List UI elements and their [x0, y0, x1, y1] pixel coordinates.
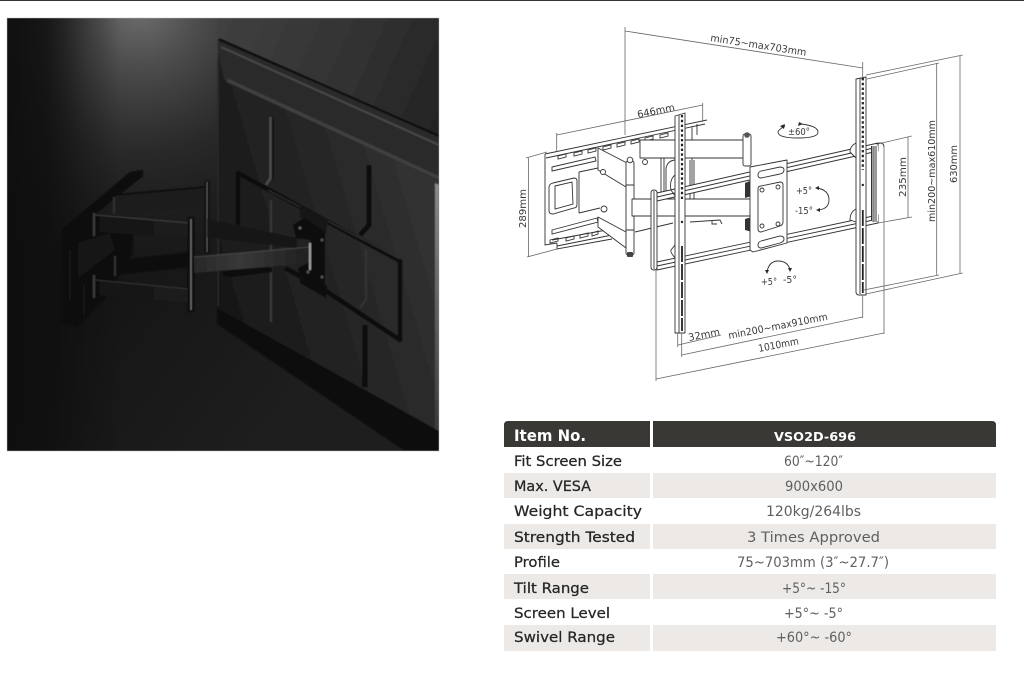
row: Screen Level: Screen Level [514, 606, 610, 622]
left vertical VESA strip [670, 113, 685, 333]
row: Swivel Range [504, 625, 996, 651]
photo edge [7, 18, 439, 451]
row: Fit Screen Size: Fit Screen Size [514, 454, 622, 470]
dimension: 630mm [866, 55, 963, 294]
row: Screen Level [514, 606, 843, 622]
dimension: 1010mm [656, 147, 884, 381]
icon: tilt +5° -15°: -15° [795, 206, 813, 217]
row: Max. VESA [504, 473, 996, 498]
row: Screen Level: +5°~ -5° [784, 606, 843, 622]
table header: VSO2D-696 [774, 429, 856, 444]
icon: screen level +5° -5°: +5° [761, 277, 777, 288]
row: Max. VESA: Max. VESA [514, 479, 591, 495]
row: Strength Tested: 3 Times Approved [747, 530, 880, 546]
row: Weight Capacity: Weight Capacity [514, 504, 642, 520]
row: Swivel Range: +60°~ -60° [776, 630, 852, 646]
row: Profile: 75~703mm (3″~27.7″) [737, 555, 889, 571]
top border line [0, 0, 1024, 1]
icon: tilt head [293, 218, 327, 286]
dimension: 32mm [678, 327, 721, 347]
dimension: min200~max610mm [864, 63, 939, 290]
centre VESA plate [750, 160, 787, 252]
row: Tilt Range: +5°~ -15° [782, 581, 846, 597]
dimension: 1010mm: 1010mm [757, 336, 800, 355]
dimension: min200~max910mm [682, 295, 863, 357]
spec table [504, 421, 996, 651]
dimension: min75~max703mm [625, 27, 863, 135]
table header [504, 421, 996, 447]
icon: swivel ±60° [778, 122, 818, 138]
swing arms line art [598, 132, 752, 257]
row: Swivel Range: Swivel Range [514, 630, 615, 646]
icon: tilt +5° -15° [795, 186, 829, 217]
dimension: 289mm: 289mm [518, 189, 529, 228]
icon: swing arms [94, 181, 310, 312]
dimension: 289mm [518, 152, 557, 257]
icon: tilt +5° -15°: +5° [796, 186, 812, 197]
product photo: mount on dark wall [7, 18, 439, 451]
row: Fit Screen Size: 60″~120″ [784, 454, 843, 470]
icon: screen level +5° -5°: -5° [783, 275, 797, 286]
row: Profile: Profile [514, 555, 560, 571]
icon: wall plate [62, 170, 143, 327]
dimension: 235mm [878, 136, 912, 223]
table header: Item No. [514, 426, 586, 445]
row: Profile [514, 555, 889, 571]
dimension: 646mm: 646mm [636, 103, 676, 121]
dimension: 235mm: 235mm [898, 157, 909, 197]
row: Weight Capacity: 120kg/264lbs [766, 504, 861, 520]
icon: swivel ±60°: ±60° [788, 127, 810, 138]
dimension: 646mm [557, 103, 703, 151]
dimension: min200~max910mm: min200~max910mm [727, 312, 829, 342]
icon: right vertical TV rail [360, 165, 369, 387]
dimension: 630mm: 630mm [949, 145, 960, 183]
row: Strength Tested: Strength Tested [514, 530, 635, 546]
TV bracket rails [651, 143, 884, 270]
row: Fit Screen Size [514, 454, 843, 470]
icon: screen level +5° -5° [761, 261, 797, 288]
row: Tilt Range: Tilt Range [513, 581, 589, 597]
dimension: min75~max703mm: min75~max703mm [710, 33, 807, 59]
icon: TV bracket frame [238, 173, 403, 340]
row: Weight Capacity [514, 504, 861, 520]
dimension: min200~max610mm: min200~max610mm [927, 120, 938, 222]
diagram: technical line drawing [518, 27, 963, 381]
row: Tilt Range [504, 574, 996, 599]
row: Strength Tested [504, 524, 996, 549]
icon: left vertical TV rail [266, 117, 273, 322]
right vertical VESA strip [850, 77, 866, 295]
row: Max. VESA: 900x600 [785, 479, 843, 495]
dimension: 32mm: 32mm [687, 327, 721, 344]
wall plate line art [545, 120, 707, 249]
